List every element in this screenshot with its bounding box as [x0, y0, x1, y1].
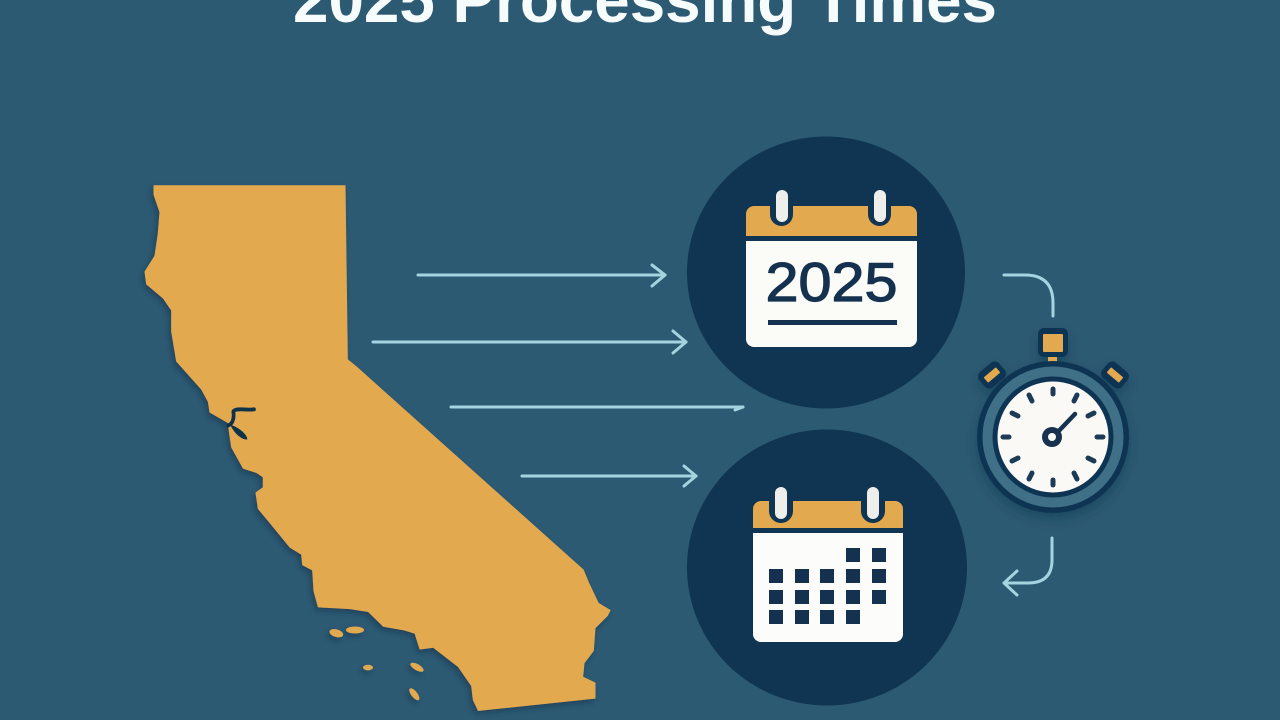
map: California: [145, 186, 610, 710]
arrow 3: [451, 407, 743, 410]
calendar rings: [769, 483, 885, 523]
San Francisco Bay inlet: [228, 409, 254, 425]
icon: stopwatch: [976, 328, 1131, 513]
curved arrow: top to stopwatch: [1004, 275, 1053, 316]
calendar header: [746, 206, 917, 236]
arrow 4: [522, 466, 696, 486]
date grid: [769, 548, 886, 624]
calendar body: [746, 241, 917, 347]
underline: [768, 320, 897, 325]
circle badge: 2025 calendar: [687, 136, 965, 408]
case: [977, 361, 1129, 513]
year label: 2025: [766, 251, 898, 313]
arrows from map to calendars: [373, 265, 743, 486]
circle badge: month calendar: [687, 430, 967, 706]
side buttons: [976, 359, 1131, 391]
dial: [998, 382, 1108, 492]
calendar body: [753, 533, 903, 642]
curved arrow: stopwatch to lower calendar: [1004, 538, 1052, 595]
hour ticks: [1003, 389, 1103, 485]
top crown: [1038, 328, 1068, 362]
calendar header: [753, 501, 903, 528]
hub: [1042, 427, 1062, 447]
Channel Islands: [329, 627, 425, 702]
arrow 2: [373, 331, 686, 353]
hand: [1053, 414, 1075, 437]
calendar rings: [770, 186, 891, 226]
arrow 1: [418, 265, 665, 286]
